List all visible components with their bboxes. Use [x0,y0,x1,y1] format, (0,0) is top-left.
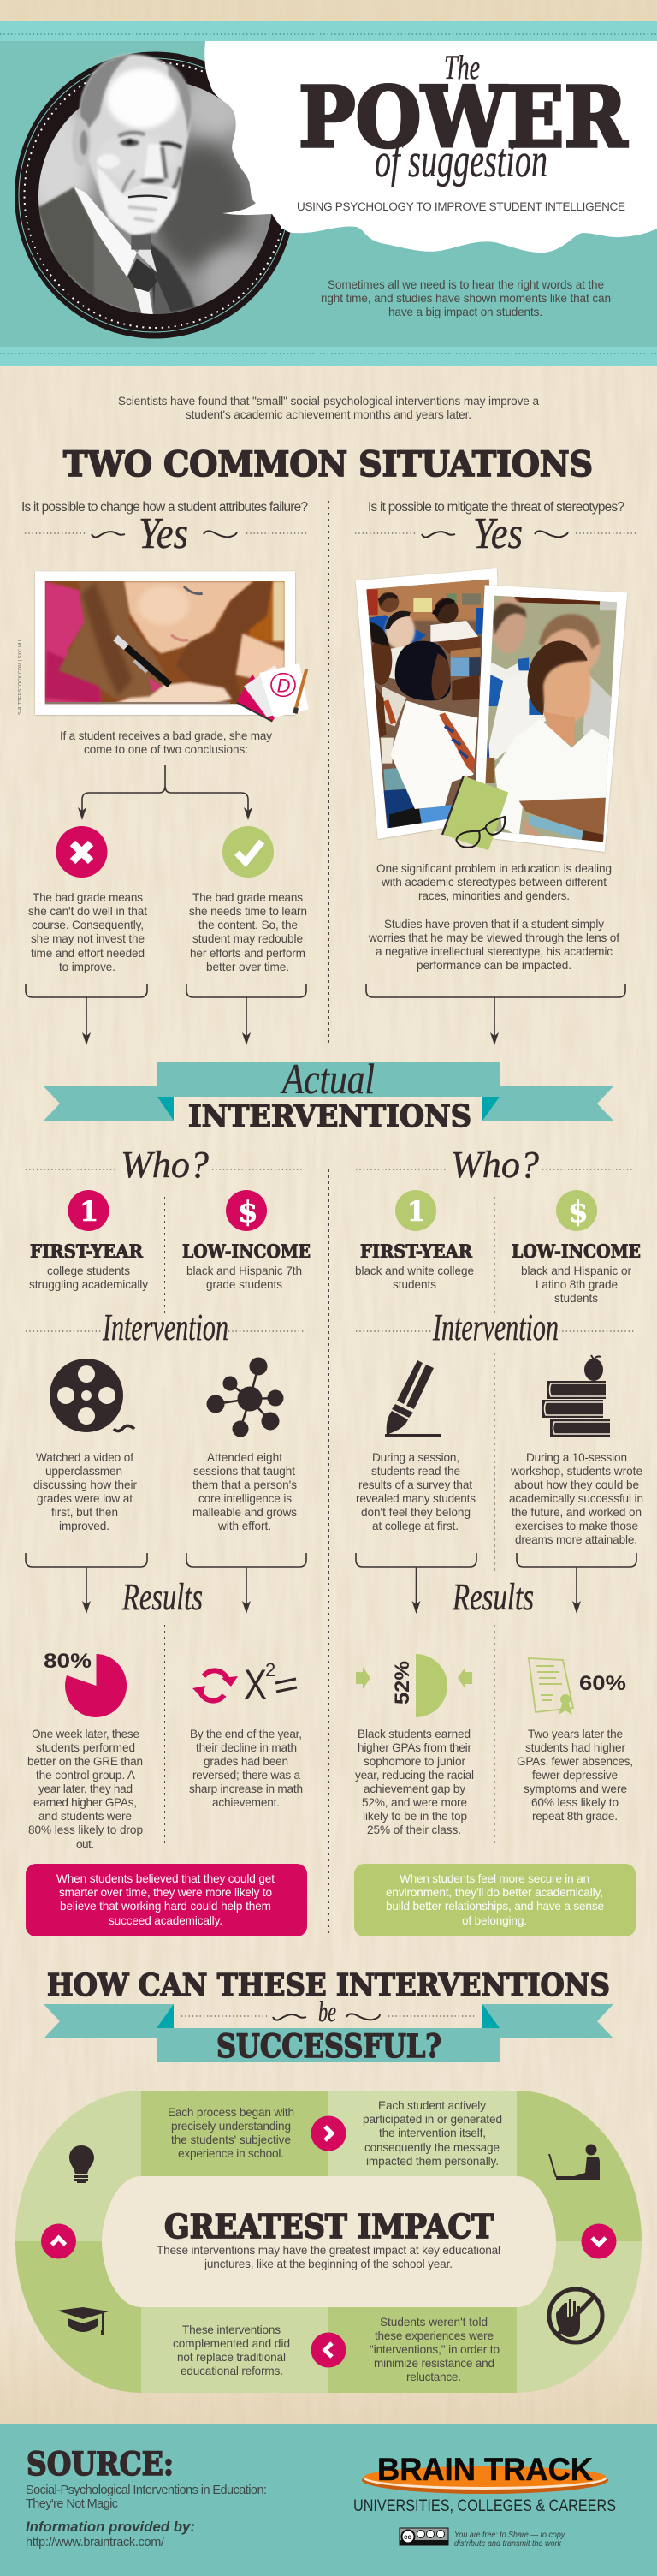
title: POWER: POWER [299,68,628,166]
result one text: and students were [38,1810,132,1823]
callout: growth takeaway: believe that working hard could help them [60,1900,271,1913]
step four text: not replace traditional [177,2351,286,2364]
group: first-year green [355,1190,474,1291]
result one text: 80% less likely to drop [28,1823,143,1836]
intervention four text: workshop, students wrote [510,1465,642,1478]
result two text: sharp increase in math [189,1782,303,1795]
step two text: consequently the message [364,2141,500,2154]
intervention two text: malleable and grows [192,1506,297,1519]
portrait background and suit [38,84,272,314]
panel: attribution of failure [18,500,309,1045]
stereotype text [368,862,619,972]
step three text [370,2316,500,2383]
conclusion: growth view: student may redouble [192,932,303,945]
intervention one text: first, but then [51,1506,118,1519]
step two text: the intervention itself, [379,2127,486,2139]
provider: http://www.braintrack.com/ [26,2536,165,2549]
icon: certificate with 60 percent: 60% [579,1672,626,1695]
icon: film reel [50,1359,134,1432]
icon: refresh and x squared [192,1659,297,1709]
student scene [45,581,285,705]
intervention one text: discussing how their [33,1478,137,1491]
source citation: They're Not Magic [26,2497,118,2511]
oval of green quadrants [15,2091,642,2393]
hair [80,55,192,135]
banner: actual interventions [44,1055,613,1134]
stereotype text: One significant problem in education is dealing [376,862,612,875]
chart: 80 percent pie: 80% [44,1650,92,1673]
license badge [400,2528,566,2549]
intro text: have a big impact on students. [388,306,542,318]
result four text: fewer depressive [532,1769,618,1782]
eyes and nose [97,133,181,193]
intervention heading right: Intervention [432,1306,559,1348]
group: first-year pink [29,1190,148,1291]
teal header field [0,41,657,347]
stereotype text: with academic stereotypes between different [381,876,607,889]
yes divider left: Yes [139,509,188,558]
result two text: their decline in math [196,1741,297,1754]
step two text: Each student actively [378,2099,486,2112]
callout: belonging takeaway: of belonging. [462,1914,527,1927]
intervention three text: at college at first. [372,1520,459,1532]
result two text: By the end of the year, [190,1728,302,1740]
yes divider right [355,509,637,558]
step four text: complemented and did [173,2337,290,2350]
group: low-income pink [182,1190,311,1291]
centre divider lower [328,1169,330,1936]
license badge: cc [404,2533,411,2541]
result three text: sophomore to junior [364,1755,465,1768]
step three text: Students weren't told [380,2316,488,2329]
step two text: impacted them personally. [366,2155,499,2168]
yes divider left [25,509,308,558]
results heading left: Results [121,1576,203,1618]
bracket arrow result three [356,1553,476,1614]
result four text: students had higher [525,1741,625,1754]
panel: footer [0,2424,657,2576]
bottom ribbon band [0,347,657,366]
results heading right: Results [452,1576,534,1618]
group: low-income green: LOW-INCOME [512,1240,641,1262]
group: low-income pink: LOW-INCOME [182,1240,311,1262]
ribbon tails [44,2004,613,2038]
callout: belonging takeaway [354,1864,636,1936]
step three text: "interventions," in order to [370,2343,500,2356]
group: low-income green: Latino 8th grade [536,1278,618,1291]
step one text: precisely understanding [171,2120,291,2133]
result three text: Black students earned [358,1728,471,1740]
centre pill [102,2176,556,2307]
result one text: the control group. A [36,1769,136,1782]
chart: 80 percent pie [44,1650,127,1717]
heading: source: SOURCE: [27,2445,174,2483]
step two text [363,2099,502,2168]
ribbon folds [157,2004,500,2028]
portrait oval frame [15,51,295,339]
footer background [0,2424,657,2576]
photo: classroom back [356,568,506,839]
lead paragraph: student's academic achievement months and years later. [186,408,471,421]
lead paragraph [118,395,539,421]
heading line one: HOW CAN THESE INTERVENTIONS [47,1968,610,2003]
heading: SUCCESSFUL: SUCCESSFUL? [216,2027,441,2065]
intervention heading left: Intervention [102,1306,228,1348]
arrow: right chevron [311,2116,346,2151]
conclusion: growth view: The bad grade means [192,891,303,904]
step one text: Each process began with [168,2106,294,2119]
photos: classroom pair [356,568,627,852]
title [297,48,628,213]
lead paragraph: Scientists have found that "small" social-psychological interventions may improve a [118,395,539,408]
question left: Is it possible to change how a student attributes failure? [21,500,308,515]
result two text: grades had been [204,1755,288,1768]
intervention three text: During a session, [372,1451,459,1464]
result two text [189,1728,303,1809]
step one text [168,2106,294,2160]
beard [97,167,177,235]
icon: graded paper and pencil [237,663,309,722]
conclusion: growth view: better over time. [206,961,289,973]
heading: greatest impact: GREATEST IMPACT [164,2208,494,2246]
step four text: educational reforms. [181,2365,283,2377]
intervention four text: the future, and worked on [512,1506,642,1519]
callout: growth takeaway: succeed academically. [109,1914,222,1927]
bracket arrow right [366,984,625,1045]
license badge: You are free: to Share — to copy, [454,2530,566,2540]
result one text: earned higher GPAs, [33,1796,137,1809]
step three text: minimize resistance and [374,2357,494,2370]
group: first-year pink: 1 [80,1195,98,1228]
portrait of Sigmund Freud [20,54,276,318]
bracket arrow result one [26,1553,147,1614]
title: of suggestion: of suggestion [375,134,548,187]
icon: green check [222,826,274,878]
intervention four text [509,1451,643,1546]
intro text: right time, and studies have shown moments like that can [321,292,611,305]
photo: student writing [35,571,309,722]
result four text [517,1728,633,1823]
stereotype text: races, minorities and genders. [418,889,570,902]
conclusion: fixed view: time and effort needed [31,947,145,960]
result one text: better on the GRE than [27,1755,143,1768]
callout: growth takeaway: smarter over time, they were more likely to [59,1886,272,1899]
heading: two common situations: TWO COMMON SITUATIONS [63,443,593,485]
intervention four text: academically successful in [509,1492,643,1505]
result one text: students performed [36,1741,135,1754]
group: low-income green: $ [568,1195,589,1229]
intervention three text: students read the [371,1465,460,1478]
panel: header [0,21,657,366]
result three text: higher GPAs from their [358,1741,471,1754]
group: first-year green: 1 [407,1195,426,1228]
provider [26,2519,195,2549]
group: first-year pink: FIRST-YEAR [30,1240,144,1262]
provider: Information provided by: [26,2519,195,2535]
icon: no hand [549,2289,602,2342]
word: INTERVENTIONS: INTERVENTIONS [188,1099,471,1134]
intervention two text: with effort. [217,1520,271,1532]
yes divider right: Yes [473,509,523,558]
conclusion: growth view [189,891,307,973]
centre divider upper [328,501,330,1044]
conclusion: fixed view: to improve. [59,961,115,973]
callout: belonging takeaway: build better relationships, and have a sense [386,1900,604,1913]
step four text: These interventions [182,2323,281,2336]
bracket arrow left one [26,984,147,1045]
title: The: The [444,48,480,86]
question right: Is it possible to mitigate the threat of stereotypes? [368,500,624,515]
source citation [26,2484,267,2511]
who heading right: Who? [451,1144,539,1186]
logo: Brain Track: BRAIN TRACK [377,2452,593,2487]
intervention one text: improved. [59,1520,110,1532]
conclusion: fixed view: she may not invest the [31,932,145,945]
top ribbon band [0,21,657,41]
icon: certificate with 60 percent [529,1658,626,1715]
icon: person at laptop [548,2144,600,2180]
conclusion intro [60,729,272,756]
result three text: likely to be in the top [363,1810,467,1823]
intervention two text: sessions that taught [193,1465,295,1478]
conclusion: fixed view: The bad grade means [33,891,143,904]
result two text: achievement. [212,1796,280,1809]
icon: refresh and x squared: 2 [265,1659,275,1681]
photo credit: SHUTTERSTOCK.COM | SXC.HU [18,640,23,715]
intervention three text: don't feel they belong [361,1506,471,1519]
logo: Brain Track [353,2452,616,2515]
intervention four text: dreams more attainable. [515,1533,637,1546]
chart: 52 percent half circle: 52% [391,1661,414,1704]
result three text: 52%, and were more [362,1796,467,1809]
speech cloud [204,41,657,253]
intervention two text: core intelligence is [198,1492,292,1505]
stereotype text: Studies have proven that if a student simply [384,918,604,931]
word be divider: be [318,1996,336,2028]
group: low-income green [512,1190,641,1305]
result two text: reversed; there was a [192,1769,300,1782]
step one text: experience in school. [178,2147,284,2160]
arrow: left chevron [311,2332,346,2368]
head [80,54,192,234]
result three text: 25% of their class. [367,1823,461,1836]
stereotype text: performance can be impacted. [417,959,571,972]
group: low-income green: students [554,1292,598,1305]
icon: books and apple [542,1355,610,1437]
result one text: year later, they had [38,1782,133,1795]
intro text: Sometimes all we need is to hear the right words at the [328,278,604,291]
who heading left: Who? [121,1144,209,1186]
subtitle: USING PSYCHOLOGY TO IMPROVE STUDENT INTELLIGENCE [297,200,625,213]
group: low-income pink: grade students [206,1278,282,1291]
result four text: Two years later the [528,1728,623,1740]
icon: fountain pen [385,1360,441,1437]
greatest impact text: junctures, like at the beginning of the school year. [204,2258,453,2270]
conclusion intro: come to one of two conclusions: [84,743,248,756]
conclusion: growth view: the content. So, the [198,919,298,931]
ribbon folds [157,1097,500,1121]
group: low-income pink: black and Hispanic 7th [186,1264,302,1277]
conclusion: fixed view: she can't do well in that [28,905,147,918]
callout: belonging takeaway: environment, they'll do better academically, [386,1886,603,1899]
intervention four text: During a 10-session [526,1451,627,1464]
intervention four text: exercises to make those [515,1520,638,1532]
intervention three text: results of a survey that [358,1478,472,1491]
arrow: down chevron [582,2224,616,2258]
icon: molecule [207,1358,283,1437]
step two text: participated in or generated [363,2113,502,2126]
icon: refresh and x squared: X [244,1661,267,1709]
intervention one text: upperclassmen [45,1465,122,1478]
ribbon lower [157,2028,500,2062]
step three text: reluctance. [406,2371,461,2383]
callout: growth takeaway [26,1864,307,1936]
conclusion: fixed view [28,891,147,973]
ribbon tails [44,1086,613,1121]
group: first-year pink: struggling academically [29,1278,148,1291]
group: first-year green: students [393,1278,436,1291]
intervention four text: about how they could be [514,1478,639,1491]
forehead highlight [107,68,178,128]
group: first-year green: black and white college [355,1264,474,1277]
intervention three text: revealed many students [356,1492,476,1505]
chart: 52 percent half circle [356,1654,472,1717]
intervention three text [356,1451,476,1532]
conclusion intro: If a student receives a bad grade, she may [60,729,272,742]
group: first-year pink: college students [47,1264,130,1277]
result four text: symptoms and were [524,1782,627,1795]
result one text [27,1728,143,1851]
intervention one text: grades were low at [37,1492,133,1505]
conclusion: growth view: her efforts and perform [190,947,305,960]
icon: notebook and glasses [442,776,508,850]
stereotype text: worries that he may be viewed through the lens of [368,931,619,944]
callout: belonging takeaway: When students feel more secure in an [400,1872,589,1885]
group: low-income pink: $ [238,1195,258,1229]
panel: stereotype threat [355,500,637,1045]
arrow: up chevron [41,2224,76,2258]
greatest impact text: These interventions may have the greatest impact at key educational [157,2244,500,2257]
intro text [321,278,611,318]
face tones [97,134,177,180]
arrow: fork to two conclusions [78,765,252,820]
intervention two text: them that a person's [192,1478,297,1491]
result four text: 60% less likely to [531,1796,619,1809]
bracket arrow result four [517,1553,636,1614]
bracket arrow result two [186,1553,306,1614]
result one text: out. [76,1838,94,1851]
result three text: year, reducing the racial [355,1769,474,1782]
result four text: GPAs, fewer absences, [517,1755,633,1768]
callout: growth takeaway: When students believed that they could get [56,1872,275,1885]
step three text: these experiences were [375,2329,494,2342]
result three text [355,1728,474,1836]
stereotype text: a negative intellectual stereotype, his academic [376,945,613,958]
panel: left intervention column [26,1144,311,1936]
intervention two text: Attended eight [207,1451,282,1464]
word: Actual: Actual [281,1055,375,1103]
step four text [173,2323,290,2377]
conclusion: growth view: she needs time to learn [189,905,307,918]
intervention one text [33,1451,137,1532]
source citation: Social-Psychological Interventions in Education: [26,2484,267,2497]
group: low-income green: black and Hispanic or [521,1264,631,1277]
step one text: the students' subjective [171,2133,291,2146]
bracket arrow left two [186,984,306,1045]
result four text: repeat 8th grade. [532,1810,618,1823]
icon: light bulb [69,2145,94,2183]
logo: Brain Track: UNIVERSITIES, COLLEGES & CAREERS [353,2497,616,2515]
icon: pink cross [56,826,108,878]
banner: how can these interventions be successful [44,1968,613,2065]
panel: greatest impact cycle [15,2091,642,2393]
ear [72,119,91,166]
icon: graded paper and pencil: D [277,675,291,696]
group: first-year green: FIRST-YEAR [360,1240,473,1262]
result three text: achievement gap by [364,1782,465,1795]
ribbon top [157,1062,500,1097]
conclusion: fixed view: course. Consequently, [32,919,144,931]
photo: classroom front [473,585,627,852]
panel: right intervention column [354,1144,643,1936]
word be divider [181,1996,475,2028]
intervention two text [192,1451,297,1532]
icon: graduation cap [57,2307,109,2335]
result one text: One week later, these [32,1728,139,1740]
intervention one text: Watched a video of [36,1451,133,1464]
greatest impact text [157,2244,500,2270]
license badge: distribute and transmit the work [454,2538,562,2549]
